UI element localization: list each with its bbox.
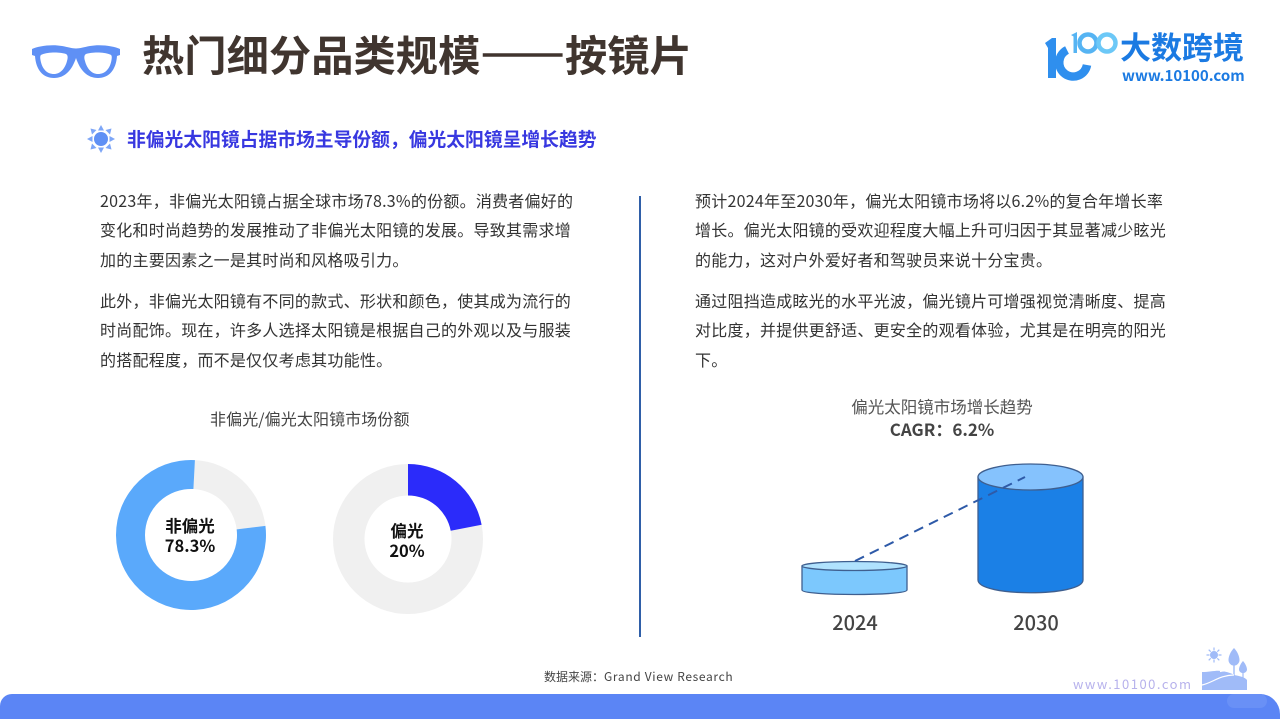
text: left paragraph 1: 加的主要因素之一是其时尚和风格吸引力。 <box>100 247 409 271</box>
donut label: non-polarized: 非偏光 <box>165 513 215 537</box>
logo mark <box>1045 32 1118 81</box>
donut label: non-polarized: 78.3% <box>165 533 215 557</box>
cylinder: 2030 <box>978 464 1083 593</box>
label: 2030: 2030 <box>1013 607 1059 636</box>
icon: sun <box>87 125 115 153</box>
subtitle: 非偏光太阳镜占据市场主导份额，偏光太阳镜呈增长趋势 <box>127 125 597 152</box>
text: right paragraph 2: 对比度，并提供更舒适、更安全的观看体验，尤其是在明亮的阳光 <box>695 317 1166 341</box>
text: left paragraph 2: 的搭配程度，而不是仅仅考虑其功能性。 <box>100 347 392 371</box>
cylinder: 2024 <box>802 562 907 594</box>
donut label: non-polarized <box>165 513 215 557</box>
text: right paragraph 2: 下。 <box>695 347 727 371</box>
label: 2024: 2024 <box>832 607 878 636</box>
logo url: www.10100.com <box>1122 65 1245 86</box>
text: right paragraph 1 <box>695 188 1166 271</box>
footer url: www.10100.com <box>1073 674 1193 693</box>
footer badge <box>1227 694 1267 708</box>
chart title: market share: 非偏光/偏光太阳镜市场份额 <box>210 406 410 430</box>
donut label: polarized: 偏光 <box>390 518 424 542</box>
text: left paragraph 2: 此外，非偏光太阳镜有不同的款式、形状和颜色，使其成为流行的 <box>100 288 571 312</box>
footer bar <box>0 694 1280 719</box>
chart title: growth trend: 偏光太阳镜市场增长趋势 <box>851 394 1033 418</box>
donut chart: polarized <box>333 464 483 614</box>
icon: glasses <box>32 45 120 78</box>
source note: 数据来源：Grand View Research <box>544 668 733 685</box>
text: left paragraph 2: 时尚配饰。现在，许多人选择太阳镜是根据自己的外观以及与服装 <box>100 317 571 341</box>
cylinder chart <box>801 463 1084 596</box>
text: right paragraph 1: 预计2024年至2030年，偏光太阳镜市场将以6.2%的复合年增长率 <box>695 188 1163 212</box>
text: left paragraph 1 <box>100 188 573 271</box>
text: left paragraph 1: 2023年，非偏光太阳镜占据全球市场78.3%的份额。消费者偏好的 <box>100 188 573 212</box>
text: right paragraph 2: 通过阻挡造成眩光的水平光波，偏光镜片可增强视觉清晰度、提高 <box>695 288 1166 312</box>
text: left paragraph 1: 变化和时尚趋势的发展推动了非偏光太阳镜的发展。导致其需求增 <box>100 217 571 241</box>
growth arrow line <box>855 477 1025 561</box>
title: 热门细分品类规模——按镜片 <box>142 23 692 84</box>
text: right paragraph 2 <box>695 288 1166 371</box>
chart subtitle: CAGR: CAGR：6.2% <box>890 416 994 441</box>
text: right paragraph 1: 增长。偏光太阳镜的受欢迎程度大幅上升可归因于其显著减少眩光 <box>695 217 1166 241</box>
donut label: polarized <box>389 518 425 562</box>
icon: landscape <box>1202 648 1247 690</box>
text: right paragraph 1: 的能力，这对户外爱好者和驾驶员来说十分宝贵。 <box>695 247 1052 271</box>
donut chart: non-polarized <box>116 460 266 610</box>
text: left paragraph 2 <box>100 288 571 371</box>
donut label: polarized: 20% <box>389 538 425 562</box>
logo name: 大数跨境 <box>1120 23 1244 68</box>
logo <box>1045 23 1245 86</box>
